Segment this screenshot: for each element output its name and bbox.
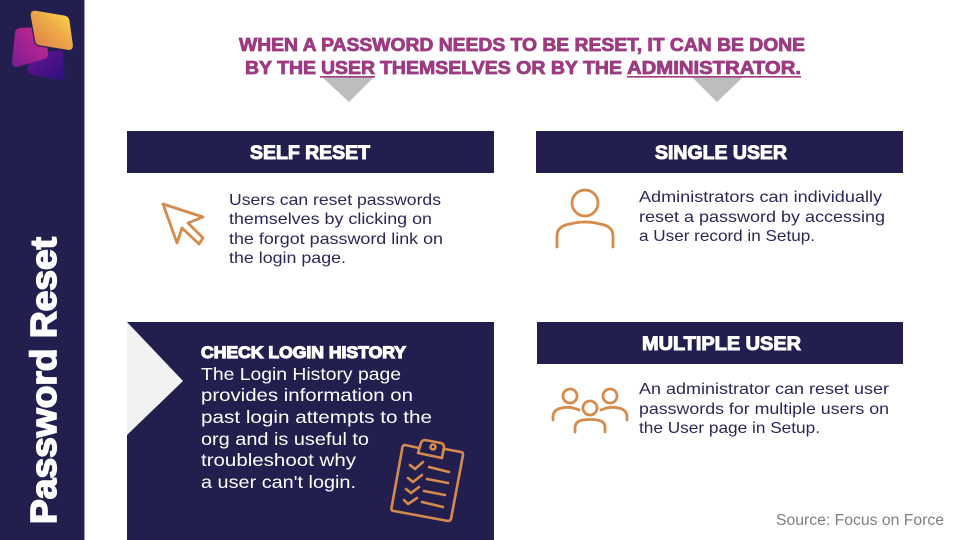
heading: ADMINISTRATOR. (627, 58, 801, 78)
panel: single user (536, 131, 903, 247)
single user header (536, 131, 903, 173)
icon: user (557, 190, 613, 247)
sidebar (0, 0, 85, 540)
arrow: to self reset (322, 77, 374, 102)
panel: multiple user (537, 322, 903, 437)
self reset text: themselves by clicking on (229, 211, 432, 228)
sidebar title: Password Reset (23, 237, 64, 524)
icon: cursor (163, 204, 203, 244)
panel: self reset (127, 131, 494, 267)
self reset text: Users can reset passwords (229, 192, 441, 209)
multiple user text: passwords for multiple users on (639, 401, 889, 418)
login history text: The Login History page (201, 364, 401, 384)
multiple user header: MULTIPLE USER (642, 334, 801, 355)
login history heading: CHECK LOGIN HISTORY (201, 343, 407, 362)
login history text: a user can't login. (201, 472, 356, 492)
login history text: past login attempts to the (201, 407, 432, 427)
single user header: SINGLE USER (655, 143, 787, 164)
login history text: org and is useful to (201, 429, 369, 449)
icon: users (553, 389, 627, 432)
self reset header (127, 131, 494, 173)
heading: WHEN A PASSWORD NEEDS TO BE RESET, IT CAN BE DONE (239, 35, 805, 55)
login history text: troubleshoot why (201, 450, 356, 470)
heading: THEMSELVES OR BY THE (380, 58, 622, 78)
logo (12, 10, 74, 80)
single user text: a User record in Setup. (639, 228, 815, 245)
login history text: provides information on (201, 385, 413, 405)
single user text: Administrators can individually (639, 189, 882, 206)
arrow: panel notch (127, 322, 183, 435)
icon: clipboard (391, 440, 463, 521)
panel: check login history (127, 322, 494, 540)
source note: Source: Focus on Force (776, 512, 944, 529)
heading: BY THE (245, 58, 316, 78)
single user text: reset a password by accessing (639, 209, 885, 226)
self reset text: the forgot password link on (229, 231, 443, 248)
heading: USER (321, 58, 375, 78)
arrow: to single user (692, 77, 743, 102)
self reset text: the login page. (229, 250, 346, 267)
self reset header: SELF RESET (250, 143, 370, 164)
multiple user text: the User page in Setup. (639, 420, 820, 437)
heading (239, 35, 805, 78)
multiple user header (537, 322, 903, 364)
multiple user text: An administrator can reset user (639, 381, 890, 398)
